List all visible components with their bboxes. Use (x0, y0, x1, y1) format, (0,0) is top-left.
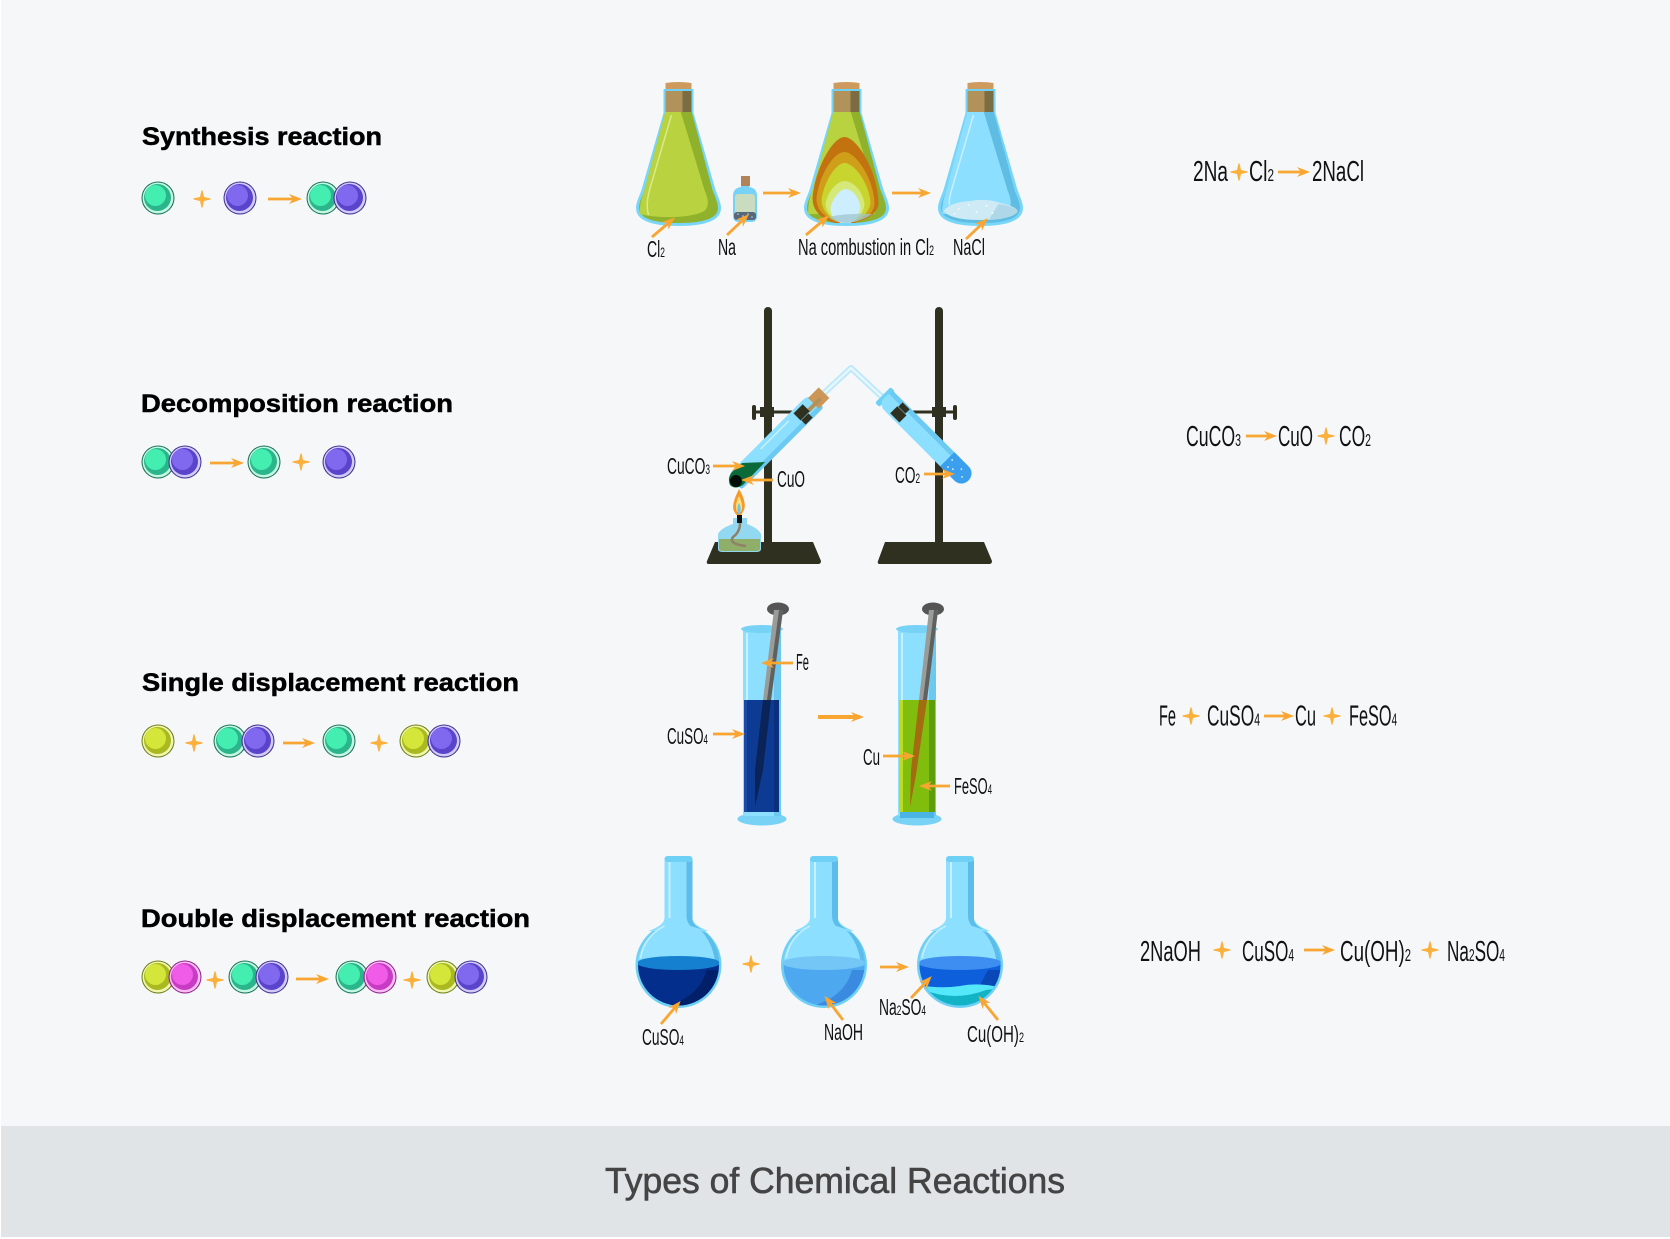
footer band with title (1, 1126, 1670, 1237)
panel: double displacement illustration (636, 856, 1024, 1050)
icon: products round flask (917, 856, 1003, 1008)
labels: double displacement: Cu(OH)2 (967, 1021, 1024, 1047)
arrow: round flask reaction (880, 966, 905, 968)
equation: double displacement: Cu(OH)2 (1340, 936, 1411, 968)
atom diagram: double displacement (142, 960, 488, 994)
labels: double displacement: NaOH (824, 1019, 863, 1045)
panel: single displacement illustration (667, 602, 992, 826)
icon: bent glass tube (823, 368, 882, 397)
labels: synthesis: Na combustion in Cl2 (798, 234, 934, 260)
labels: decomposition: CuO (777, 466, 805, 492)
equation: synthesis: Cl2 (1249, 156, 1274, 188)
equation: decomposition: CO2 (1339, 421, 1371, 453)
equation: synthesis: 2Na (1193, 156, 1229, 188)
labels: decomposition (667, 453, 920, 492)
arrows: decomposition (713, 466, 951, 480)
icon: Na bottle (733, 176, 757, 222)
heading: synthesis: Synthesis reaction (142, 123, 382, 151)
icon: spirit burner (718, 489, 761, 552)
atom diagram: synthesis (142, 182, 366, 214)
icon: cylinder with CuSO4 and nail (738, 602, 789, 826)
icon: left stand (707, 307, 821, 564)
icon: Cl2 flask (636, 82, 721, 226)
labels: single displacement: Cu (863, 744, 880, 770)
icon: plus (742, 956, 760, 972)
atom diagram: single displacement (142, 724, 460, 758)
labels: double displacement (642, 994, 1024, 1050)
atom diagram: decomposition (142, 446, 356, 478)
labels: synthesis: Cl2 (647, 236, 665, 262)
labels: double displacement: CuSO4 (642, 1024, 684, 1050)
footer band with title: Types of Chemical Reactions (605, 1160, 1065, 1201)
labels: single displacement: Fe (796, 649, 809, 675)
icon: right test tube (875, 387, 976, 488)
icon: left test tube (726, 387, 829, 491)
icon: NaCl flask (938, 82, 1023, 226)
equation: single displacement: FeSO4 (1349, 700, 1397, 732)
heading: single displacement: Single displacement reaction (142, 669, 519, 697)
equation: decomposition: CuCO3 (1186, 421, 1241, 453)
equation: decomposition: CuO (1278, 421, 1313, 453)
panel: synthesis illustration (636, 82, 1023, 262)
labels: synthesis: Na (718, 234, 736, 260)
labels: single displacement (667, 649, 992, 799)
icon: Na combustion flask (804, 82, 889, 226)
panel: decomposition reaction, left (141, 390, 453, 478)
labels: double displacement: Na2SO4 (879, 994, 926, 1020)
heading: decomposition: Decomposition reaction (141, 390, 453, 418)
labels: decomposition: CO2 (895, 462, 920, 488)
equation: single displacement: Fe (1159, 700, 1176, 732)
labels: synthesis: NaCl (953, 234, 985, 260)
equation: double displacement: 2NaOH (1140, 936, 1201, 968)
icon: right stand (878, 307, 992, 564)
arrows: single displacement (713, 663, 950, 786)
heading: double displacement: Double displacement reaction (141, 905, 530, 933)
icon: CuSO4 round flask (636, 856, 722, 1008)
icon: NaOH round flask (781, 856, 867, 1008)
panel: single displacement reaction, left (142, 669, 519, 758)
panel: decomposition illustration (667, 307, 992, 564)
labels: decomposition: CuCO3 (667, 453, 710, 479)
equation: double displacement: CuSO4 (1242, 936, 1294, 968)
arrows: double displacement (661, 979, 998, 1024)
equation: double displacement (1140, 936, 1505, 968)
panel: synthesis reaction, left (142, 123, 382, 214)
panel: double displacement reaction, left (141, 905, 530, 994)
equation: synthesis (1193, 156, 1364, 188)
arrow: cylinder reaction (818, 715, 860, 719)
equation: single displacement: Cu (1295, 700, 1316, 732)
equation: decomposition (1186, 421, 1371, 453)
icon: cylinder with FeSO4 and copper nail (892, 602, 944, 826)
labels: synthesis (647, 234, 985, 262)
arrows: synthesis (652, 193, 985, 239)
equation: single displacement (1159, 700, 1397, 732)
equation: synthesis: 2NaCl (1312, 156, 1364, 188)
labels: single displacement: CuSO4 (667, 723, 708, 749)
equation: single displacement: CuSO4 (1207, 700, 1260, 732)
equation: double displacement: Na2SO4 (1447, 936, 1505, 968)
labels: single displacement: FeSO4 (954, 773, 992, 799)
